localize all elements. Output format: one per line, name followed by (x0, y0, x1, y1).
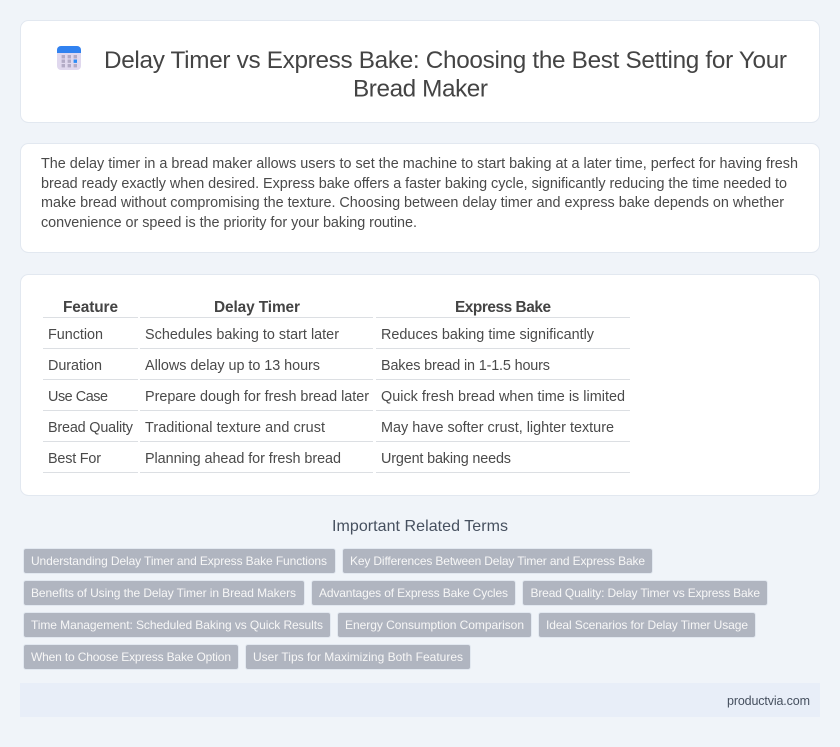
row: use case: Prepare dough for fresh bread later (145, 389, 369, 405)
row: use case: Quick fresh bread when time is limited (381, 389, 625, 405)
related terms tags: Energy Consumption Comparison (345, 618, 524, 632)
related terms tags (24, 548, 768, 670)
related terms heading: Important Related Terms (332, 518, 508, 535)
icon: calendar (57, 46, 81, 70)
row: function: Function (48, 327, 103, 343)
row: best for: Best For (48, 451, 101, 467)
related terms tags: Bread Quality: Delay Timer vs Express Bake (530, 586, 760, 600)
panel: introduction text (20, 144, 820, 252)
related terms tags: Ideal Scenarios for Delay Timer Usage (546, 618, 748, 632)
table header (63, 299, 551, 316)
title (104, 47, 787, 102)
intro paragraph: convenience or speed is the priority for your baking routine. (41, 215, 417, 231)
row: bread quality: May have softer crust, lighter texture (381, 420, 614, 436)
related terms tags: When to Choose Express Bake Option (31, 650, 231, 664)
row: duration (48, 358, 550, 374)
row: function (48, 327, 595, 343)
intro paragraph: The delay timer in a bread maker allows users to set the machine to start baking at a later time, perfect for having fresh (41, 156, 798, 172)
row: use case: Use Case (48, 389, 108, 405)
row: duration: Duration (48, 358, 102, 374)
row: function: Reduces baking time significantly (381, 327, 595, 343)
row: best for: Urgent baking needs (381, 451, 511, 467)
intro paragraph: bread ready exactly when desired. Express bake offers a faster baking cycle, significantly reducing the time needed to (41, 176, 787, 192)
related terms tags: Key Differences Between Delay Timer and Express Bake (350, 554, 645, 568)
row: bread quality (48, 420, 614, 436)
panel: header (20, 20, 820, 122)
row: bread quality: Traditional texture and crust (145, 420, 325, 436)
related terms tags: Understanding Delay Timer and Express Bake Functions (31, 554, 327, 568)
related terms tags: Advantages of Express Bake Cycles (319, 586, 508, 600)
title: Delay Timer vs Express Bake: Choosing the Best Setting for Your (104, 47, 787, 74)
intro paragraph: make bread without compromising the texture. Choosing between delay timer and express bake depends on whether (41, 195, 784, 211)
related terms tags: Time Management: Scheduled Baking vs Quick Results (31, 618, 323, 632)
row: best for (48, 451, 511, 467)
row: function: Schedules baking to start later (145, 327, 339, 343)
related terms tags: Benefits of Using the Delay Timer in Bread Makers (31, 586, 296, 600)
footer: productvia.com (727, 694, 810, 708)
row: duration: Bakes bread in 1-1.5 hours (381, 358, 550, 374)
row: best for: Planning ahead for fresh bread (145, 451, 341, 467)
row: bread quality: Bread Quality (48, 420, 134, 436)
row: duration: Allows delay up to 13 hours (145, 358, 320, 374)
title: Bread Maker (353, 76, 488, 102)
footer (20, 683, 820, 717)
table header: Delay Timer (214, 299, 300, 316)
table header: Express Bake (455, 299, 551, 316)
table header: Feature (63, 299, 118, 316)
related terms tags: User Tips for Maximizing Both Features (253, 650, 463, 664)
row: use case (48, 389, 625, 405)
panel: comparison table (20, 274, 820, 496)
intro paragraph (41, 156, 798, 231)
